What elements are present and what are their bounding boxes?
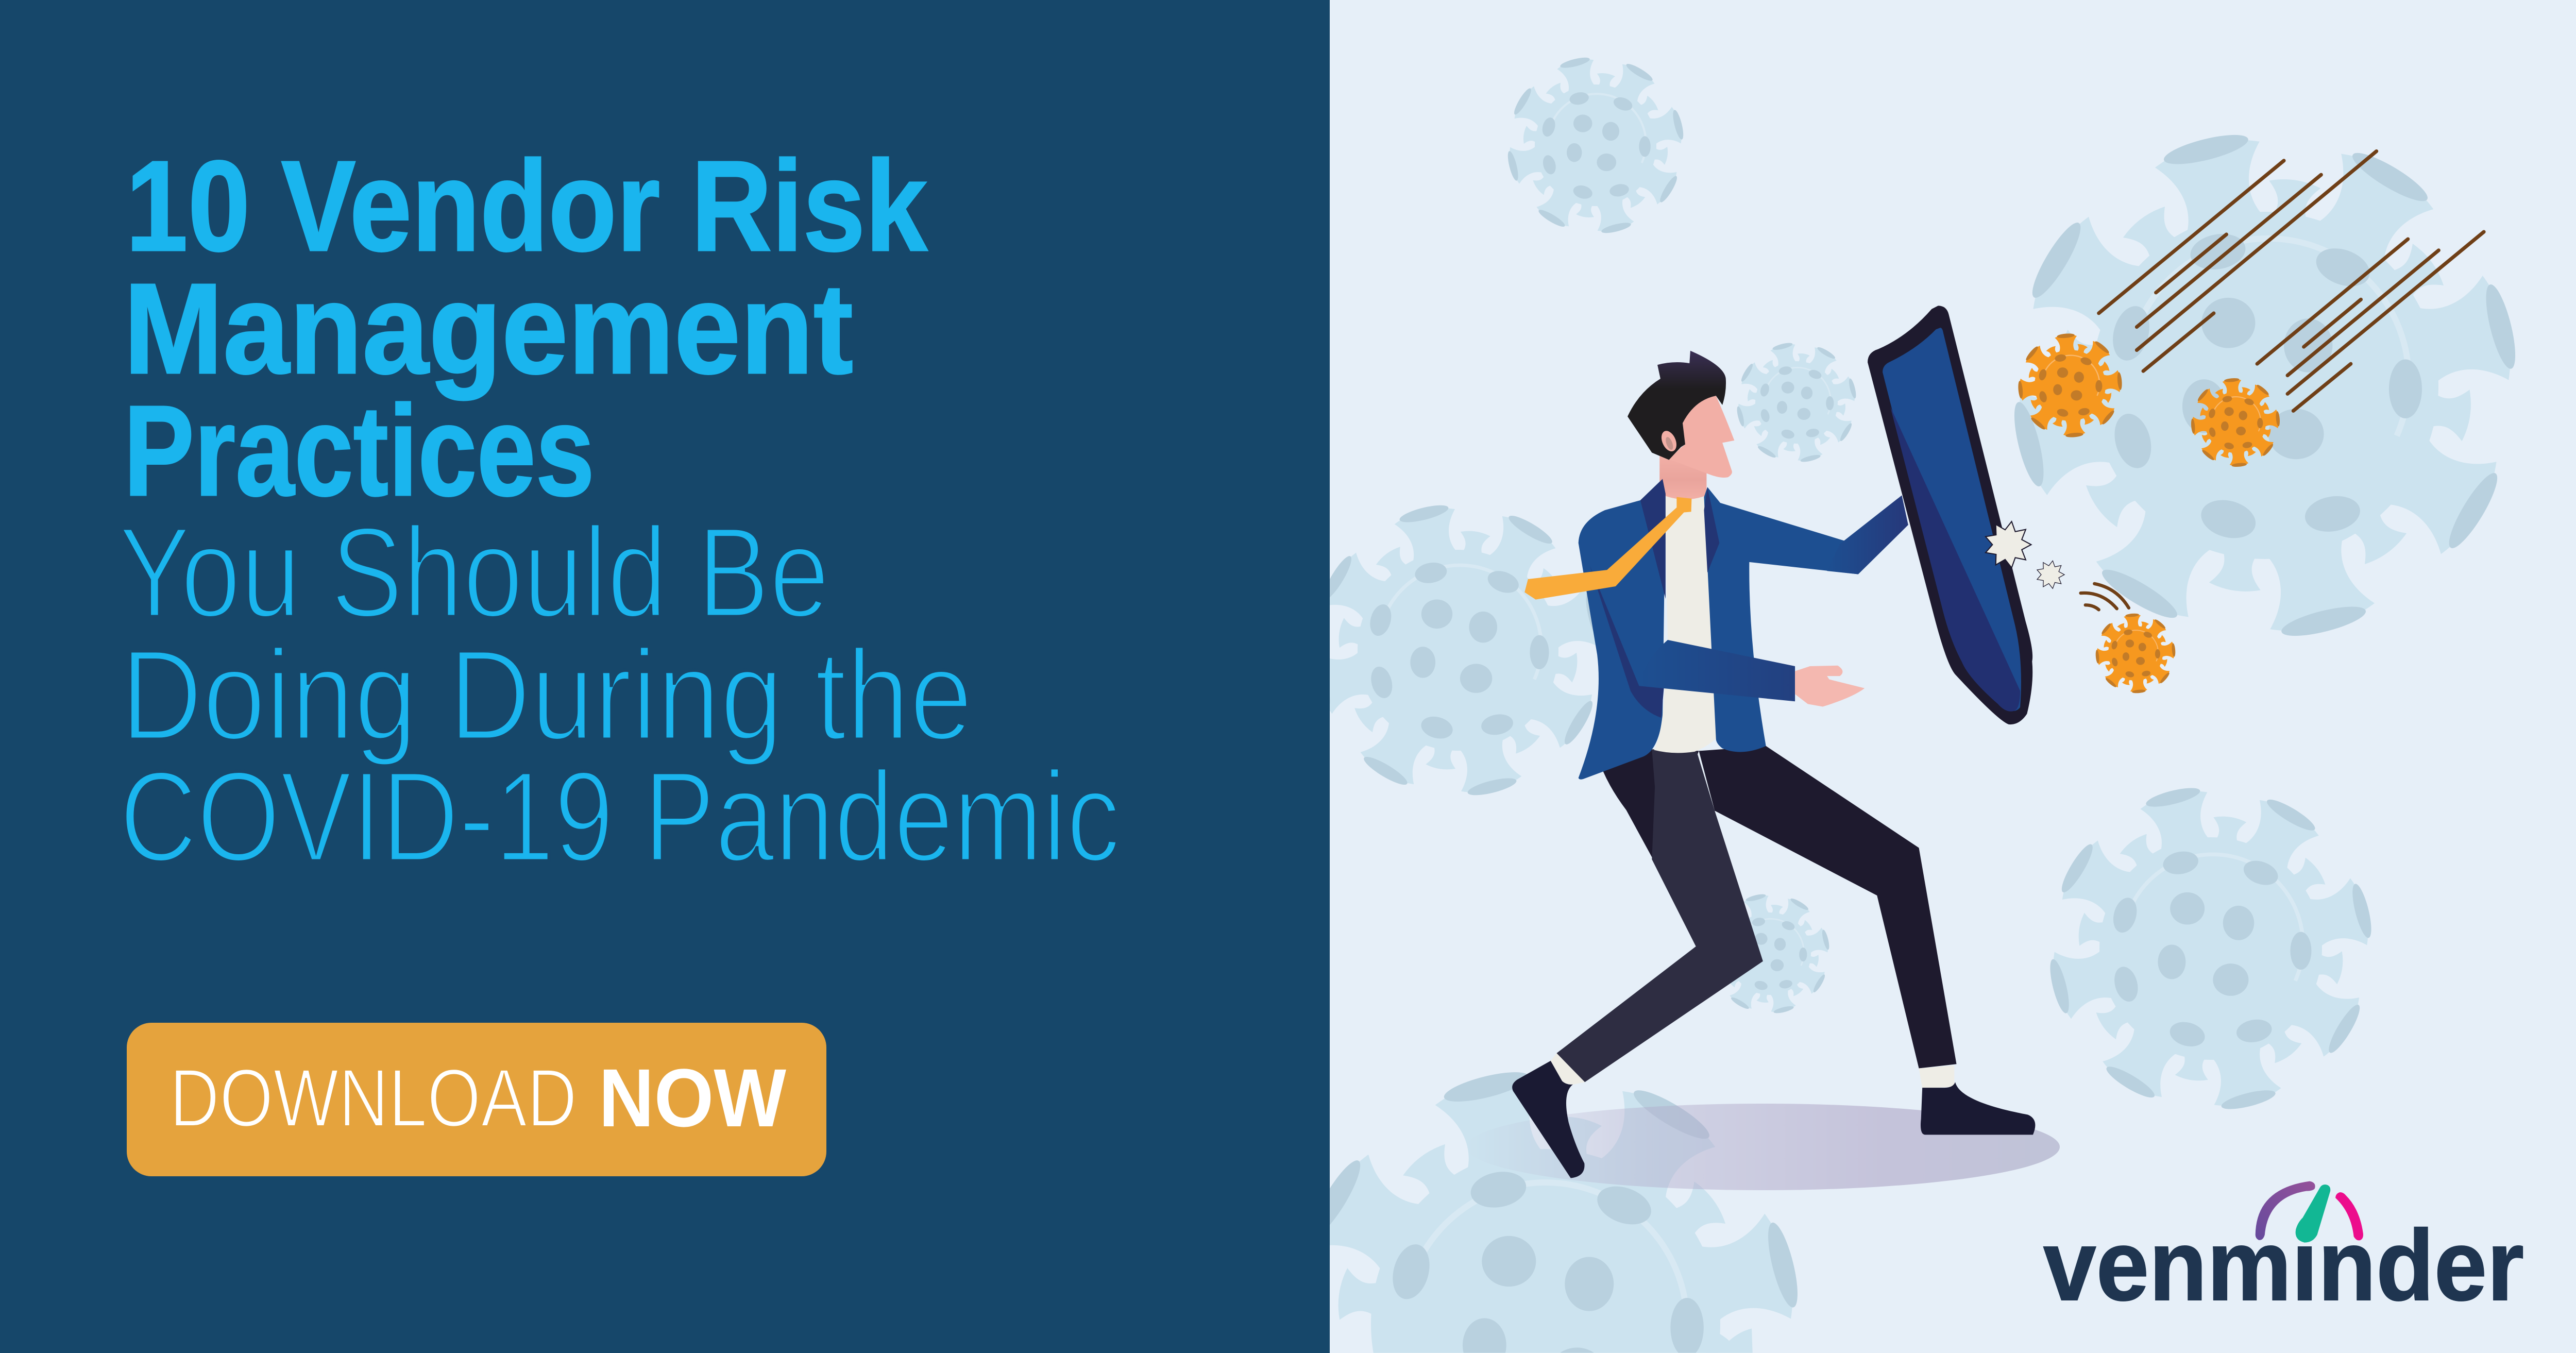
- tie: [1524, 497, 1691, 600]
- virus: large bottom left, drawn only down to the frame edge: [1299, 1063, 1806, 1353]
- download button: NOW: [599, 1052, 786, 1144]
- hair: [1628, 351, 1726, 460]
- neck: [1659, 456, 1706, 499]
- title line 3: Practices: [124, 379, 595, 522]
- figure: legs and shoes: [1512, 746, 2035, 1178]
- lapels: [1704, 487, 1719, 572]
- left panel background: [0, 0, 1330, 1353]
- ground shadow: [1466, 1104, 2060, 1190]
- bounce arcs: [2081, 584, 2129, 610]
- shirt: [1654, 494, 1716, 753]
- orange virus: upper left: [2014, 329, 2126, 442]
- logo: venminder: [2043, 1181, 2524, 1322]
- logo gauge: [2256, 1181, 2363, 1243]
- subtitle line 1: You Should Be: [118, 500, 829, 644]
- title: [124, 134, 928, 522]
- lower arm: [1639, 640, 1795, 701]
- face: [1669, 396, 1734, 478]
- virus: large top right: [1958, 78, 2572, 692]
- virus: small behind legs: [1697, 881, 1843, 1027]
- subtitle line 3: COVID-19 Pandemic: [120, 745, 1120, 888]
- orange virus: bounced: [2092, 610, 2179, 697]
- download button: [127, 1023, 826, 1176]
- virus: top small: [1488, 38, 1703, 253]
- shield: [1868, 306, 2032, 724]
- download button: DOWNLOAD: [170, 1052, 577, 1144]
- inner jacket shade: [1590, 566, 1664, 718]
- virus: lower right: [2014, 752, 2408, 1145]
- title line 1: 10 Vendor Risk: [126, 134, 928, 278]
- figure: torso and head: [1524, 351, 1908, 780]
- subtitle: [118, 500, 1120, 888]
- motion streaks: [2099, 151, 2484, 411]
- virus: small behind head: [1723, 329, 1870, 476]
- title line 2: Management: [124, 257, 853, 400]
- orange virus: centre: [2188, 375, 2283, 470]
- impact bursts: [1986, 521, 2064, 588]
- hand: [1795, 666, 1865, 706]
- left side of jacket: [1579, 479, 1666, 780]
- ear: [1659, 430, 1679, 452]
- right side of jacket with raised arm: [1704, 487, 1858, 752]
- logo wordmark: venminder: [2043, 1209, 2524, 1322]
- right panel background: [1330, 0, 2576, 1353]
- subtitle line 2: Doing During the: [121, 623, 973, 767]
- virus: left medium: [1280, 472, 1636, 828]
